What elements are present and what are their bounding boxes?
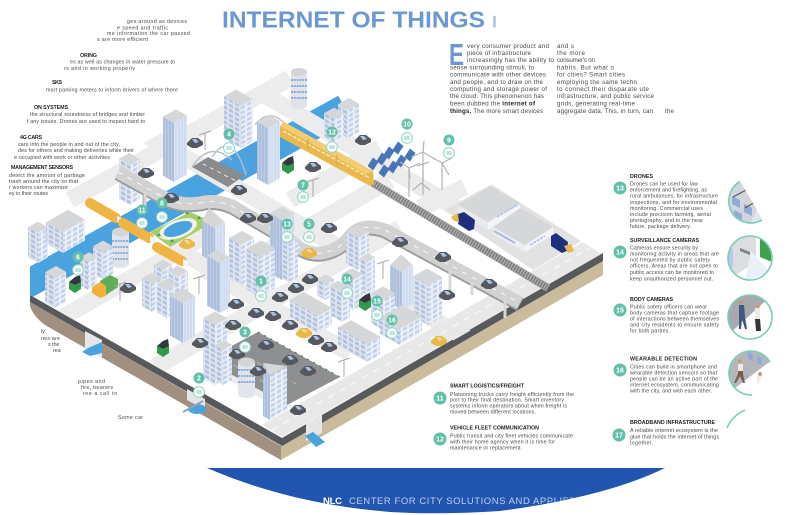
marker 12: 12 bbox=[328, 130, 336, 136]
park with lake bbox=[150, 211, 213, 247]
rail track bbox=[373, 183, 548, 288]
marker 1 bbox=[256, 276, 266, 301]
marker 14 bbox=[342, 274, 352, 298]
legend: body cameras: for both parties. bbox=[630, 328, 670, 334]
marker 13: 13 bbox=[283, 222, 291, 228]
legend: smart logistics: moved between different locations. bbox=[450, 410, 536, 416]
marker 7 bbox=[298, 180, 308, 202]
marker 9 bbox=[444, 134, 454, 158]
blue truck: left bbox=[451, 212, 475, 231]
left text column: ges around as devices bbox=[127, 19, 187, 25]
left text column: nes are bbox=[41, 336, 60, 342]
legend: vehicle fleet: with their home agency when it is time for bbox=[450, 440, 555, 446]
left text column: des for others and making deliveries while their bbox=[18, 148, 134, 154]
wind turbines bbox=[400, 141, 452, 197]
legend: vehicle fleet: 12 bbox=[436, 436, 444, 444]
intro text: infrastructure, and public service bbox=[557, 93, 655, 100]
left text column: s are more efficient bbox=[97, 37, 149, 43]
marker 6 bbox=[72, 252, 84, 275]
legend: surveillance cameras: monitoring activity in areas that are bbox=[630, 252, 719, 258]
legend: drones: include precision farming, aerial bbox=[630, 212, 711, 218]
marker 2 bbox=[194, 372, 204, 397]
marker 8: 8 bbox=[160, 200, 164, 208]
inset: surveillance camera bbox=[728, 236, 772, 281]
legend: broadband infrastructure: A reliable internet ecosystem is the bbox=[630, 428, 718, 434]
inset: wearable detection bbox=[728, 351, 772, 397]
solar panels bbox=[368, 142, 416, 178]
legend: surveillance cameras: 14 bbox=[616, 250, 624, 256]
intro text: grids, generating real-time bbox=[557, 100, 636, 108]
blue truck: right bbox=[551, 233, 574, 253]
culverts and water outflows bbox=[82, 331, 325, 447]
left text column: fire, bearers bbox=[81, 385, 113, 391]
legend: drones: enforcement and firefighting, as bbox=[630, 188, 707, 194]
legend: drones: Drones can be used for law bbox=[630, 182, 698, 188]
marker 5: 5 bbox=[307, 222, 311, 228]
intro text: and s bbox=[557, 43, 574, 50]
legend: surveillance cameras: keep unauthorized personnel out. bbox=[630, 276, 713, 282]
intro text: computing and storage power of bbox=[450, 86, 547, 93]
left text column: MANAGEMENT SENSORS bbox=[11, 165, 73, 171]
intro text: consumer's on bbox=[557, 57, 596, 64]
marker 10 bbox=[402, 118, 412, 143]
left text column: ON SYSTEMS bbox=[34, 105, 68, 111]
marker 3 bbox=[240, 326, 250, 352]
intro text: the bbox=[665, 108, 675, 115]
city ground: river and roads bbox=[20, 78, 603, 437]
left text column: SKS bbox=[52, 80, 62, 86]
marker 5 bbox=[304, 218, 314, 242]
street grid bbox=[63, 78, 480, 405]
left text column: e speed and traffic bbox=[117, 26, 168, 32]
title: INTERNET OF THINGS bbox=[222, 6, 485, 32]
footer band bbox=[207, 468, 665, 513]
legend: wearable detection: Cities can build in smartphone and bbox=[630, 364, 717, 370]
inset: body cameras bbox=[728, 295, 772, 339]
footer band: NLC bbox=[323, 496, 342, 507]
legend: wearable detection: 16 bbox=[616, 368, 624, 374]
left buildings bbox=[28, 210, 129, 308]
marker 4 bbox=[224, 128, 234, 153]
legend: vehicle fleet: VEHICLE FLEET COMMUNICATION bbox=[450, 426, 539, 432]
legend: body cameras: BODY CAMERAS bbox=[630, 297, 673, 303]
marker 15: 15 bbox=[373, 298, 381, 306]
marker 14: 14 bbox=[343, 276, 351, 284]
intro text: and people, and to draw on the bbox=[450, 79, 544, 86]
drop cap: E bbox=[449, 37, 464, 72]
inset: broadband arc bbox=[727, 410, 745, 428]
legend: broadband infrastructure: 17 bbox=[615, 432, 623, 440]
left text column: detect the amount of garbage bbox=[9, 173, 85, 179]
cylinder tower bbox=[112, 228, 129, 268]
legend: smart logistics: Platooning trucks carry freight efficiently from the bbox=[450, 392, 574, 398]
legend: surveillance cameras: not frequented by public safety bbox=[630, 257, 710, 263]
intro text: aggregate data. This, in turn, can bbox=[557, 108, 654, 115]
cars bbox=[120, 135, 497, 415]
train bbox=[280, 122, 374, 186]
legend: broadband infrastructure: glue that holds the internet of things bbox=[630, 434, 719, 440]
legend: vehicle fleet bbox=[434, 426, 573, 451]
left text column: s the bbox=[48, 342, 60, 348]
marker 2: 2 bbox=[197, 376, 201, 382]
legend: wearable detection bbox=[614, 356, 719, 395]
legend: wearable detection: people can be an active part of the bbox=[630, 377, 718, 383]
intro text: habits. But what o bbox=[557, 64, 615, 72]
left text column: ly bbox=[41, 329, 45, 335]
marker 4: 4 bbox=[227, 132, 231, 138]
legend: surveillance cameras: public access can be monitored to bbox=[630, 270, 714, 276]
marker 10: 10 bbox=[403, 122, 411, 128]
legend: wearable detection: internet ecosystem, communicating bbox=[630, 383, 719, 389]
legend: smart logistics bbox=[434, 384, 574, 416]
left text column: rea bbox=[53, 348, 61, 354]
legend: broadband infrastructure bbox=[612, 420, 719, 447]
legend: surveillance cameras: SURVEILLANCE CAMERAS bbox=[630, 238, 699, 244]
title: I bbox=[492, 6, 497, 32]
intro text: for cities? Smart cities bbox=[557, 72, 625, 78]
warehouses bbox=[451, 186, 574, 253]
parking lot bbox=[232, 332, 340, 405]
left text column: rs and in working properly bbox=[64, 66, 135, 72]
garbage truck bbox=[92, 275, 118, 298]
intro text: the more bbox=[557, 50, 586, 57]
legend: wearable detection: wearable detection sensors so that bbox=[630, 371, 718, 377]
intro text: communicate with other devices bbox=[450, 72, 546, 78]
front road bbox=[262, 242, 603, 437]
left text column: ORING bbox=[80, 53, 97, 59]
road bridge over river bbox=[192, 116, 298, 187]
left text column: es as well as changes in water pressure to bbox=[70, 60, 175, 66]
legend: drones: DRONES bbox=[630, 174, 653, 180]
legend: body cameras: and city residents to ensure safety bbox=[630, 322, 719, 328]
marker 3: 3 bbox=[243, 330, 247, 336]
marker 15 bbox=[372, 296, 382, 320]
intro text: very consumer product and bbox=[467, 43, 550, 50]
legend: smart logistics: 11 bbox=[436, 396, 444, 402]
left text column: ey in their routes bbox=[9, 191, 48, 197]
lamp posts bbox=[137, 131, 211, 205]
tanker trucks bbox=[90, 203, 188, 266]
buildings behind highway bbox=[119, 68, 359, 205]
central buildings bbox=[142, 206, 442, 420]
legend: wearable detection: with the city, and with each other. bbox=[630, 389, 712, 395]
tall tower by river bbox=[257, 115, 280, 185]
left text column: r workers can maximize bbox=[9, 185, 68, 191]
legend: surveillance cameras bbox=[614, 238, 719, 282]
round tower bbox=[291, 68, 307, 109]
legend: wearable detection: WEARABLE DETECTION bbox=[630, 356, 697, 362]
legend: body cameras: Public safety officers can wear bbox=[630, 304, 707, 310]
map markers bbox=[72, 118, 454, 397]
marker 11 bbox=[136, 204, 148, 228]
marker 13 bbox=[282, 218, 292, 242]
left text column: e occupied with work or other activities bbox=[14, 155, 110, 161]
intro text: increasingly has the ability to bbox=[467, 57, 555, 64]
warehouse yard bbox=[445, 183, 583, 270]
intro text bbox=[449, 37, 675, 115]
marker 11: 11 bbox=[138, 208, 146, 214]
elevated highway bbox=[118, 172, 520, 318]
legend: body cameras bbox=[614, 297, 719, 334]
legend: drones: inspections, and for environmental bbox=[630, 200, 717, 206]
legend: surveillance cameras: Cameras ensure security by bbox=[630, 245, 698, 251]
marker 16 bbox=[386, 314, 398, 338]
city base: walls bbox=[30, 253, 603, 460]
parking cylinder bbox=[238, 358, 255, 398]
left text column: f any issues. Drones are used to inspect hard to bbox=[27, 119, 145, 125]
lamp posts bbox=[114, 162, 429, 377]
legend: drones: photography, and in the near bbox=[630, 218, 703, 224]
left text column: the structural soundness of bridges and timber bbox=[30, 112, 145, 118]
legend: drones: monitoring. Commercial uses bbox=[630, 206, 703, 212]
legend: drones bbox=[614, 174, 718, 230]
legend: broadband infrastructure: BROADBAND INFRASTRUCTURE bbox=[630, 420, 715, 426]
marker 1: 1 bbox=[259, 278, 263, 286]
intro text: sense surrounding stimuli, to bbox=[450, 64, 535, 72]
intro text: to connect their disparate ute bbox=[557, 86, 650, 93]
legend: drones: rural ambulances, for infrastructure bbox=[630, 194, 718, 200]
legend: drones: future, package delivery. bbox=[630, 224, 691, 230]
legend: broadband infrastructure: together. bbox=[630, 441, 653, 447]
dumpsters front bbox=[157, 293, 371, 357]
marker 12 bbox=[326, 126, 338, 152]
legend: body cameras: 15 bbox=[616, 308, 624, 314]
intro text: things. The more smart devices bbox=[450, 108, 543, 115]
title bbox=[224, 12, 496, 28]
left text column: mart parking meters to inform drivers of where there bbox=[46, 88, 178, 94]
intro text: the cloud. This phenomenon has bbox=[450, 93, 544, 100]
inset: drones bbox=[728, 180, 762, 224]
intro text: piece of infrastructure bbox=[467, 50, 532, 57]
legend: vehicle fleet: Public transit and city fleet vehicles communicate bbox=[450, 434, 573, 440]
legend: vehicle fleet: maintenance or replacement. bbox=[450, 445, 522, 451]
wedge tower bbox=[263, 363, 287, 420]
marker 9: 9 bbox=[447, 138, 451, 144]
intro text: been dubbed the internet of bbox=[450, 100, 536, 108]
left text column: 4G CARS bbox=[20, 135, 42, 141]
footer band: CENTER FOR CITY SOLUTIONS AND APPLIED R bbox=[349, 496, 587, 507]
left text column: ree a call to bbox=[83, 391, 117, 397]
legend: drones: 13 bbox=[616, 186, 624, 192]
legend: body cameras: of interactions between themselves bbox=[630, 317, 719, 323]
left text column: pipes and bbox=[78, 379, 105, 385]
intro text: employing the same techn bbox=[557, 79, 638, 86]
marker 8 bbox=[156, 198, 168, 222]
marker 7: 7 bbox=[301, 182, 305, 190]
taxis bbox=[179, 239, 447, 346]
left text column: Some car bbox=[118, 415, 143, 421]
marker 16: 16 bbox=[388, 318, 396, 324]
left text column: trash around the city so that bbox=[9, 179, 79, 185]
legend: smart logistics: SMART LOGISTICS/FREIGHT bbox=[450, 384, 525, 390]
legend: smart logistics: port to their final destination. Smart inventory bbox=[450, 398, 564, 404]
legend: smart logistics: systems inform operators about when freight is bbox=[450, 403, 567, 409]
river bbox=[20, 108, 345, 288]
left text column: cars into the people in and out of the city, bbox=[18, 142, 120, 148]
marker 6: 6 bbox=[76, 254, 80, 262]
legend: surveillance cameras: officers. Areas that are not open to bbox=[630, 263, 718, 269]
legend: body cameras: body cameras that capture footage bbox=[630, 310, 719, 316]
left text column: me information the car passed bbox=[107, 31, 190, 37]
left text column bbox=[9, 19, 190, 421]
dumpsters bbox=[69, 156, 294, 293]
